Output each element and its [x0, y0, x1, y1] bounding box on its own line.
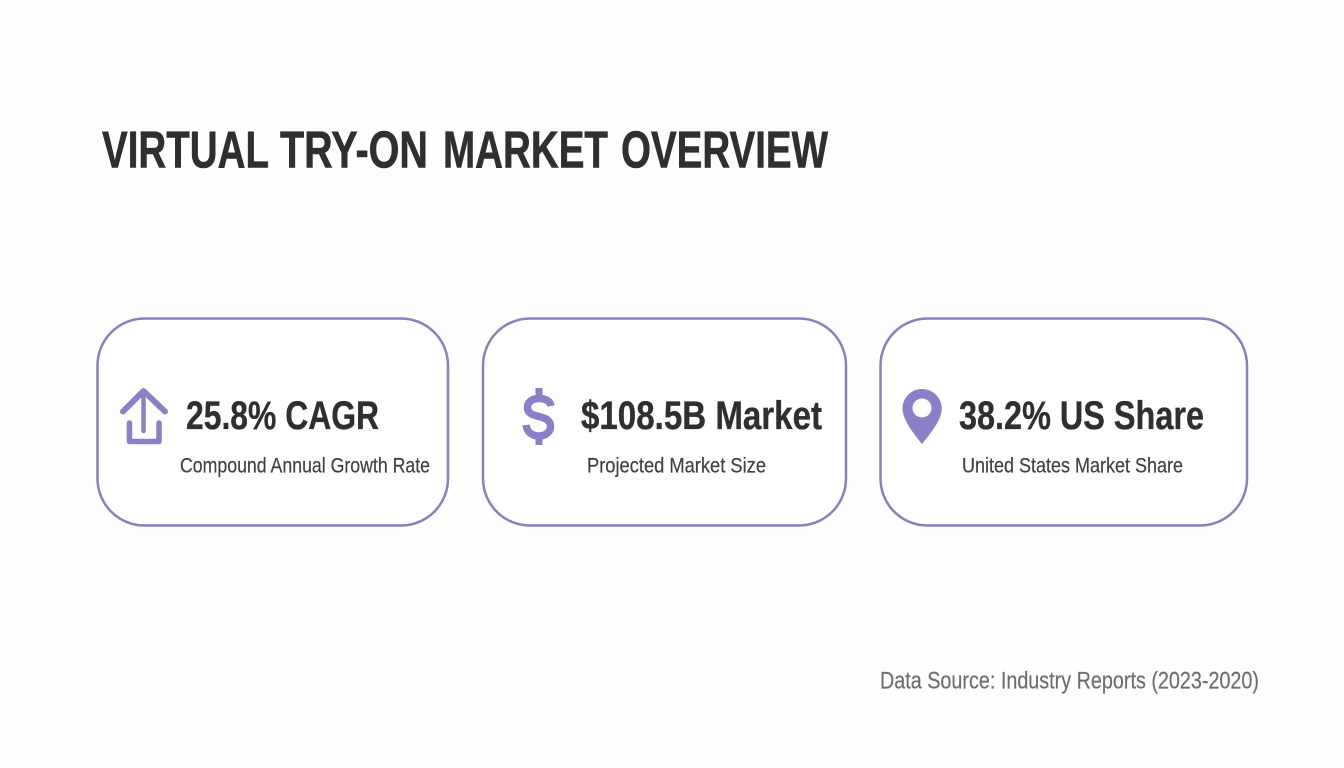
icon: location pin: [902, 389, 942, 444]
description: compound annual growth rate: Compound Annual Growth Rate: [180, 454, 430, 478]
title: MARKET: [443, 122, 608, 180]
icon: dollar sign: [526, 388, 551, 445]
panel: US share card: [880, 318, 1247, 526]
panel: CAGR card: [98, 318, 448, 526]
icon: upload arrow: [123, 391, 165, 442]
data source note: Data Source: Industry Reports (2023-2020): [880, 668, 1259, 694]
description: United States market share: United States Market Share: [962, 454, 1183, 478]
metric: 25.8% CAGR: 25.8% CAGR: [186, 394, 379, 438]
metric: 38.2% US Share: 38.2% US Share: [959, 394, 1204, 438]
panel: market size card: [483, 318, 846, 526]
title: [102, 122, 829, 180]
description: projected market size: Projected Market Size: [587, 454, 766, 478]
title: VIRTUAL: [102, 122, 269, 180]
metric: $108.5B Market: $108.5B Market: [581, 394, 822, 438]
title: TRY-ON: [280, 122, 428, 180]
title: OVERVIEW: [621, 122, 829, 180]
